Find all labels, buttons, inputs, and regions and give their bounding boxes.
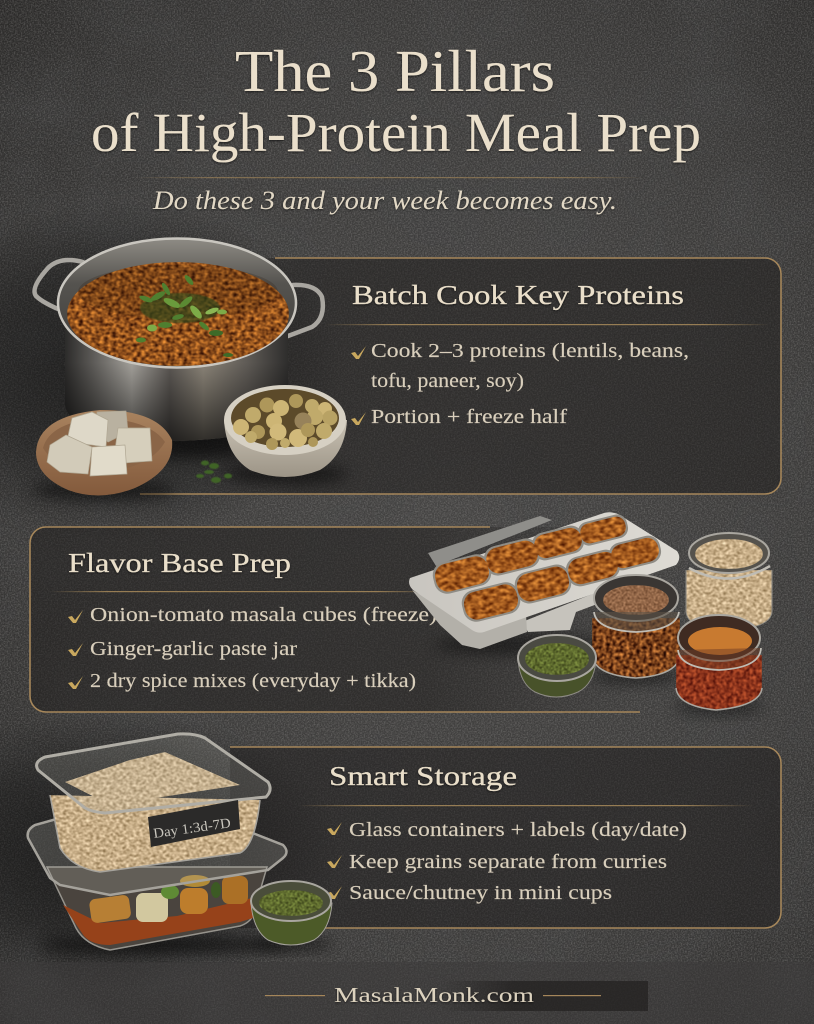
bullets: batch cook: Cook 2–3 proteins (lentils, beans, (371, 340, 689, 362)
chalkboard label: Day 1:3d-7D (152, 816, 232, 842)
bullets: flavor base: Onion-tomato masala cubes (freeze) (90, 604, 437, 626)
bullets: batch cook (351, 340, 689, 428)
illustration: chutney cup (251, 881, 332, 950)
bullets: flavor base: 2 dry spice mixes (everyday + tikka) (90, 670, 416, 692)
heading: batch cook: Batch Cook Key Proteins (352, 280, 684, 310)
footer band (0, 962, 814, 1024)
bullets: smart storage: Keep grains separate from curries (349, 851, 667, 873)
bullets: smart storage: Glass containers + labels (day/date) (349, 819, 687, 841)
bullets: flavor base (68, 604, 437, 692)
bullets: smart storage: Sauce/chutney in mini cups (349, 882, 612, 904)
title: The 3 Pillars (235, 38, 555, 104)
tofu cubes (47, 411, 152, 476)
subtitle: Do these 3 and your week becomes easy. (152, 186, 617, 215)
bullets: smart storage (327, 819, 687, 904)
illustration: pot of lentils (34, 238, 323, 458)
masala cubes (432, 515, 661, 622)
panel: smart storage (230, 747, 781, 928)
panel: batch cook key proteins (140, 258, 781, 494)
illustration: red spice jar (675, 615, 763, 714)
title (91, 38, 701, 163)
illustration: chickpea bowl (224, 385, 348, 484)
illustration: pasta jar (686, 533, 772, 630)
chickpeas (233, 394, 338, 450)
icon: scattered cilantro (196, 460, 232, 483)
panel: flavor base prep (30, 527, 640, 712)
bullets: batch cook: Portion + freeze half (371, 406, 567, 428)
pot handles (34, 260, 323, 336)
bullets: flavor base: Ginger-garlic paste jar (90, 638, 297, 660)
chalkboard label (148, 800, 240, 847)
heading: flavor base: Flavor Base Prep (68, 548, 291, 578)
illustration: tofu bowl (32, 410, 176, 500)
title: of High-Protein Meal Prep (91, 102, 701, 163)
illustration: brown spice jar (592, 575, 680, 684)
illustration: small herb bowl (518, 635, 596, 697)
illustration: freezer tray with masala cubes (409, 512, 679, 655)
curry pieces (89, 875, 248, 924)
illustration: stacked glass containers (28, 734, 290, 953)
heading: smart storage: Smart Storage (329, 761, 517, 791)
tray wells (430, 512, 664, 625)
cilantro garnish (136, 274, 233, 357)
bullets: batch cook: tofu, paneer, soy) (371, 370, 524, 392)
lower container with curry (28, 818, 287, 950)
footer: website: MasalaMonk.com (334, 983, 534, 1007)
upper container with rice (37, 734, 270, 872)
